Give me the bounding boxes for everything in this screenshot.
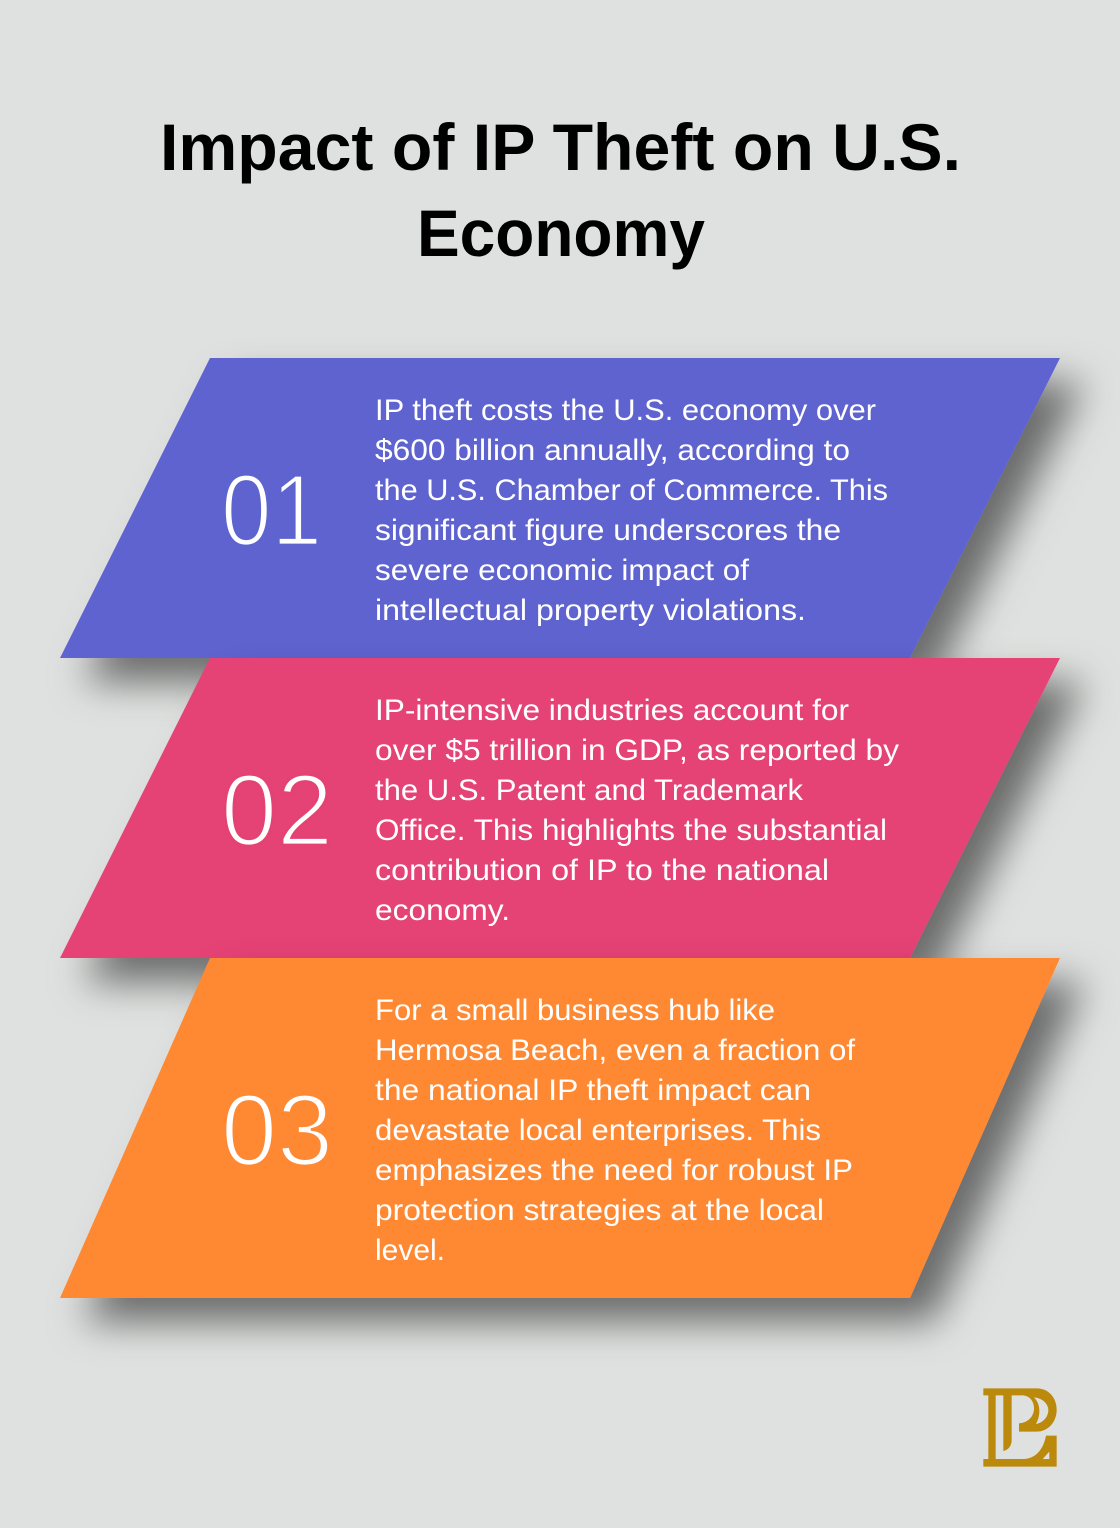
panel 1 text: severe economic impact of xyxy=(375,554,750,587)
panel 3 text: Hermosa Beach, even a fraction of xyxy=(375,1034,856,1067)
panel 3: local small business impact xyxy=(60,958,1060,1298)
panel 2 text xyxy=(375,694,899,927)
panel 3 shape xyxy=(60,958,1060,1298)
panel 2 text: economy. xyxy=(375,894,510,927)
panel 3 text: level. xyxy=(375,1234,445,1267)
panel 2 shape xyxy=(60,658,1060,958)
panel 2 text: Office. This highlights the substantial xyxy=(375,814,887,847)
panel 3 text: For a small business hub like xyxy=(375,994,775,1027)
panel 1 text: significant figure underscores the xyxy=(375,514,841,547)
panel 3 text: the national IP theft impact can xyxy=(375,1074,811,1107)
panel 1 text: IP theft costs the U.S. economy over xyxy=(375,394,876,427)
panel 3 text: emphasizes the need for robust IP xyxy=(375,1154,853,1187)
title xyxy=(160,110,961,270)
panel 2 number: 02 xyxy=(221,755,333,867)
panel 3 text: devastate local enterprises. This xyxy=(375,1114,821,1147)
panel 3 text: protection strategies at the local xyxy=(375,1194,824,1227)
panel 2 text: contribution of IP to the national xyxy=(375,854,829,887)
icon: PL monogram logo xyxy=(983,1388,1057,1467)
panel 1 text: intellectual property violations. xyxy=(375,594,806,627)
title: Economy xyxy=(417,196,705,270)
panel 2: $5 trillion GDP contribution xyxy=(60,658,1060,958)
panel 2 text: IP-intensive industries account for xyxy=(375,694,849,727)
panel 2 text: the U.S. Patent and Trademark xyxy=(375,774,804,807)
panel 1 shape xyxy=(60,358,1060,658)
panel 3 text xyxy=(375,994,856,1267)
panel 1 text: $600 billion annually, according to xyxy=(375,434,850,467)
panel 1: $600 billion annual cost xyxy=(60,358,1060,658)
panel 1 text: the U.S. Chamber of Commerce. This xyxy=(375,474,888,507)
panel 1 text xyxy=(375,394,888,627)
panel 2 text: over $5 trillion in GDP, as reported by xyxy=(375,734,899,767)
panel 3 number: 03 xyxy=(221,1075,333,1187)
panel 1 number: 01 xyxy=(221,455,322,567)
title: Impact of IP Theft on U.S. xyxy=(160,110,961,184)
